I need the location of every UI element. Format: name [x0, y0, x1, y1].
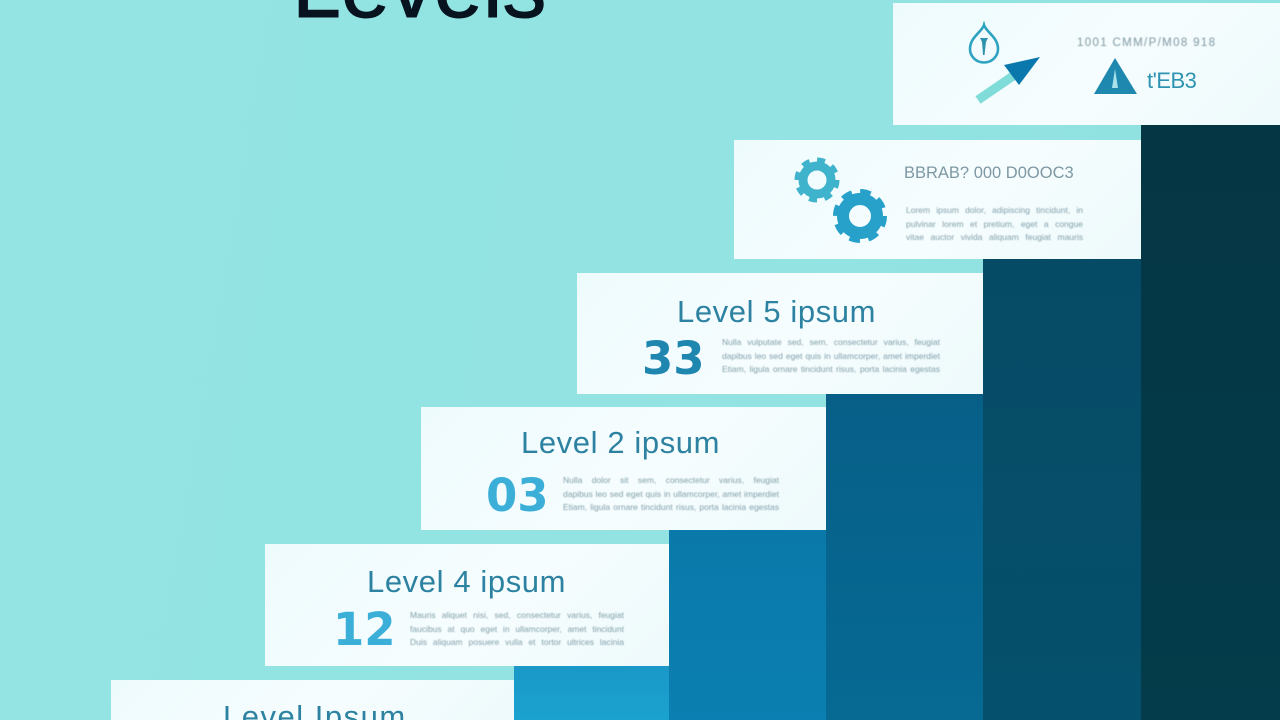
panel: level 4 — [265, 544, 669, 666]
body text: Duis aliquam posuere vulla et tortor ultrices lacinia — [410, 637, 624, 647]
panel: level 2 — [421, 407, 826, 530]
body text: Etiam, ligula ornare tincidunt risus, porta lacinia egestas — [563, 502, 779, 512]
body text: dapibus leo sed eget quis in ullamcorper, amet imperdiet — [722, 350, 940, 360]
body text: Lorem ipsum dolor, adipiscing tincidunt, in — [906, 205, 1083, 215]
body text: dapibus leo sed eget quis in ullamcorper, amet imperdiet — [563, 488, 779, 498]
body text: Etiam, ligula ornare tincidunt risus, porta lacinia egestas — [722, 364, 940, 374]
panel: level 5 — [577, 273, 983, 394]
heading: Level 5 ipsum — [677, 294, 876, 329]
panel: level base — [111, 680, 514, 720]
panel: top level — [893, 3, 1280, 125]
icon: gears — [794, 158, 887, 243]
number: 12 — [333, 603, 396, 656]
icon: warning triangle — [1094, 58, 1137, 94]
small label: 1001 CMM/P/M08 918 — [1077, 37, 1216, 49]
number: 03 — [486, 469, 549, 522]
body text — [722, 337, 940, 374]
heading: Level 2 ipsum — [521, 425, 720, 460]
body text — [562, 475, 780, 512]
body text: pulvinar lorem et pretium, eget a congue — [906, 218, 1083, 228]
body text: faucibus at quo eget in ullamcorper, amet tincidunt — [410, 624, 624, 634]
body text: vitae auctor vivida aliquam feugiat mauris — [906, 232, 1083, 242]
heading: BBRAB? 000 D0OOC3 — [904, 164, 1074, 182]
icon: water drop — [968, 21, 1000, 64]
small value: t'EB3 — [1147, 68, 1196, 93]
body text: Nulla vulputate sed, sem, consectetur varius, feugiat — [722, 337, 940, 347]
panel: gears level — [734, 140, 1141, 259]
icon: arrow — [976, 57, 1040, 104]
body text: Mauris aliquet nisi, sed, consectetur varius, feugiat — [410, 610, 624, 620]
heading: Level 4 ipsum — [367, 564, 566, 599]
body text — [410, 610, 624, 647]
number: 33 — [642, 332, 705, 385]
body text — [906, 205, 1084, 242]
body text: Nulla dolor sit sem, consectetur varius, feugiat — [563, 475, 779, 485]
